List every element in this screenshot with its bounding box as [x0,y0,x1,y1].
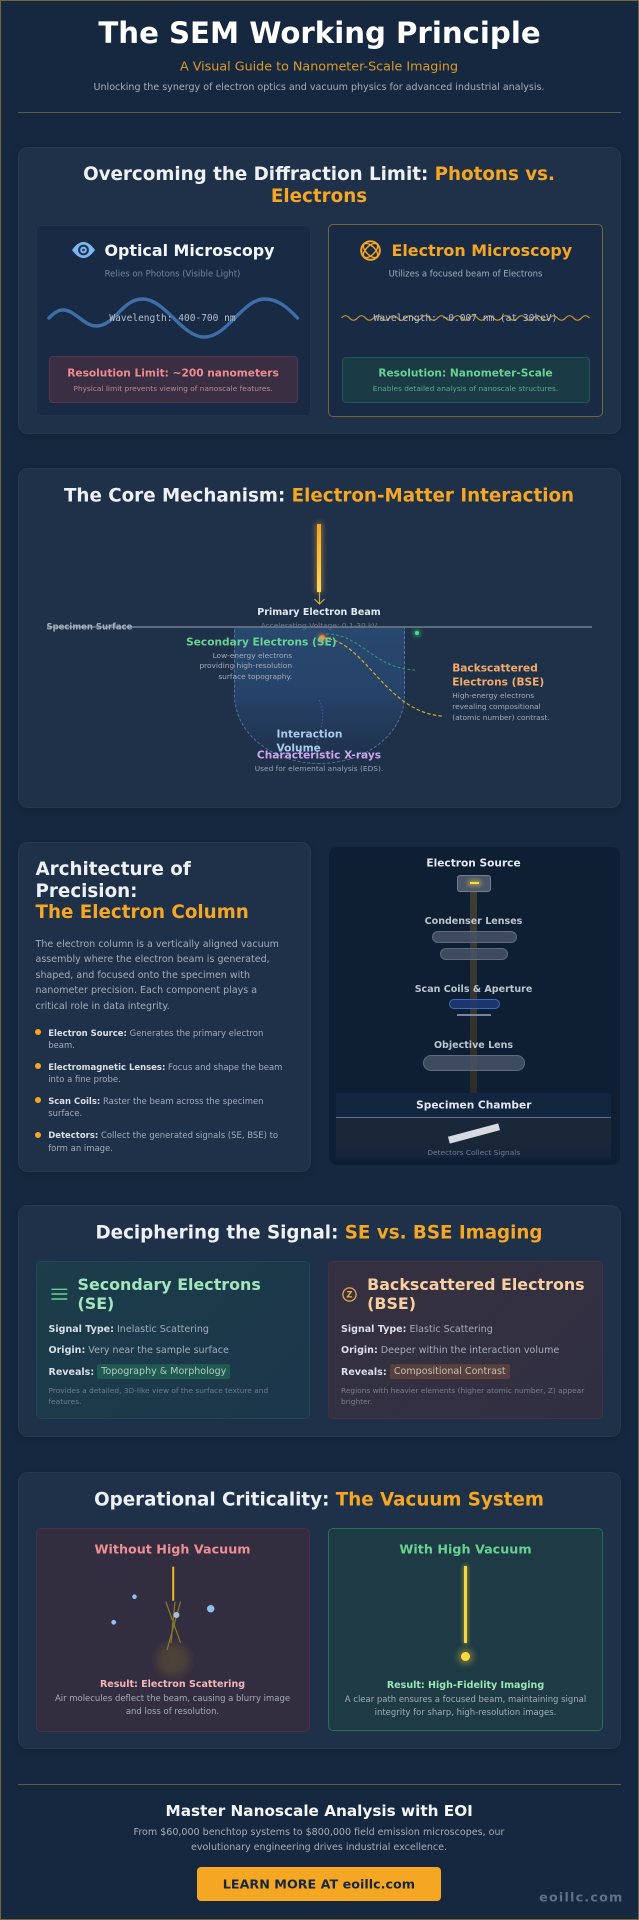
condenser lenses [425,916,522,960]
interaction volume [234,626,404,764]
reveals: Reveals: [48,1367,94,1378]
label: secondary electrons: Low-energy electrons [213,651,292,660]
specimen surface line [46,626,592,628]
panel: photons vs electrons [18,146,620,434]
scan coils and aperture [415,984,532,1016]
callout: resolution limit: Resolution Limit: ~200 nanometers [67,367,279,379]
label: secondary electrons: providing high-resolution [199,661,292,670]
heading: Precision: [36,881,137,902]
note [48,1386,268,1406]
footer heading: Master Nanoscale Analysis with EOI [166,1802,473,1820]
callout: resolution limit [48,356,298,402]
icon: topography lines [52,1288,68,1300]
list item: detectors: Detectors: Collect the generated signals (SE, BSE) to [48,1130,278,1140]
label: characteristic x-rays [255,749,383,773]
note: brighter. [341,1397,372,1406]
label: backscattered electrons: Backscattered [452,662,538,674]
panel: SE vs BSE imaging [18,1205,620,1437]
card: optical microscopy [36,224,310,416]
list item: electron source [35,1028,263,1050]
button: LEARN MORE AT eoillc.com [223,1877,415,1892]
description: nanometer precision. Each component plays a [36,985,257,996]
title: The SEM Working Principle [98,16,541,50]
note: Provides a detailed, 3D-like view of the surface texture and [48,1386,268,1395]
result text: integrity for sharp, high-resolution images. [375,1707,556,1717]
card subtitle: Relies on Photons (Visible Light) [105,268,240,278]
specimen chamber: Specimen Chamber [416,1099,531,1111]
list item: electron source: beam. [48,1040,75,1050]
signal paths [316,634,442,745]
icon: z contrast [342,1287,357,1302]
list item: lenses [35,1062,282,1084]
label: interaction volume [276,728,342,755]
label: interaction volume: Interaction [276,728,342,740]
label: characteristic x-rays: Used for elemental analysis (EDS). [255,764,383,773]
note: Regions with heavier elements (higher atomic number, Z) appear [341,1386,584,1395]
icon: eye [72,242,95,258]
scattered beam [111,1566,214,1650]
focused beam [464,1566,467,1643]
electron source: Electron Source [426,858,521,870]
list item: scan coils: Scan Coils: Raster the beam across the specimen [48,1096,264,1106]
result text [344,1694,586,1717]
panel: core mechanism [18,468,620,808]
callout: resolution: Resolution: Nanometer-Scale [378,368,553,380]
chart: short wavelength wave [341,315,590,321]
card title: (SE) [78,1294,114,1313]
specimen chamber [336,1093,611,1158]
note [341,1386,584,1406]
wavelength label: Wavelength: 400-700 nm [109,313,236,324]
list item: scan coils: surface. [48,1108,82,1118]
card: with high vacuum [328,1528,602,1731]
electron source [426,858,521,892]
panel: vacuum system [18,1472,620,1749]
origin: Origin: Deeper within the interaction volume [341,1345,559,1356]
list item: detectors: form an image. [48,1143,113,1153]
watermark: eoillc.com [539,1889,624,1904]
label: backscattered electrons: Electrons (BSE) [452,677,544,689]
label: voltage: Accelerating Voltage: 0.1-30 kV [261,621,377,630]
condenser lenses: Condenser Lenses [425,916,522,927]
subtitle: A Visual Guide to Nanometer-Scale Imaging [180,58,458,73]
card title: (BSE) [367,1294,416,1313]
glow: blurred spot [150,1638,194,1682]
arrow: beam direction [314,592,325,605]
card title [367,1275,585,1313]
card: electron microscopy [328,224,602,416]
tagline: Unlocking the synergy of electron optics and vacuum physics for advanced industrial analysis. [94,82,544,93]
card title: Electron Microscopy [392,241,572,260]
heading: Overcoming the Diffraction Limit: Photons vs. [83,164,555,185]
card title [78,1275,261,1313]
icon: electron lattice [360,240,381,261]
panel: electron column text [18,842,310,1172]
reveals: Reveals: [341,1367,387,1378]
specimen chamber: Detectors Collect Signals [427,1148,520,1157]
beam path [470,892,477,1092]
heading: The Core Mechanism: Electron-Matter Interaction [64,485,574,506]
focused spot [461,1652,470,1661]
header [94,16,544,93]
tag [390,1364,510,1379]
heading [83,164,555,206]
label: specimen surface: Specimen Surface [46,621,132,631]
label: backscattered electrons: (atomic number) contrast. [452,713,550,722]
list item: detectors [35,1130,278,1153]
card: backscattered electrons [328,1261,602,1419]
primary electron beam [317,524,321,592]
signal type: Signal Type: Inelastic Scattering [48,1324,209,1335]
callout: resolution [342,356,590,402]
objective lens [423,1040,525,1071]
list item: scan coils [35,1096,264,1118]
card title: With High Vacuum [399,1542,532,1557]
card title: Secondary Electrons [78,1275,261,1294]
tag [97,1364,230,1379]
heading: Deciphering the Signal: SE vs. BSE Imaging [96,1223,542,1244]
footer [134,1802,624,1904]
card: secondary electrons [36,1261,310,1419]
heading [36,859,249,923]
card subtitle: Utilizes a focused beam of Electrons [389,269,542,279]
wavelength label: Wavelength: ~0.007 nm (at 30keV) [374,313,557,324]
card: without high vacuum [36,1528,310,1732]
description: shaped, and focused onto the specimen with [36,970,250,981]
electron impact point [319,635,325,641]
callout: resolution: Enables detailed analysis of nanoscale structures. [373,384,558,393]
tag: Topography & Morphology [101,1366,226,1377]
scan coils and aperture: Scan Coils & Aperture [415,984,532,995]
description: critical role in data integrity. [36,1001,170,1012]
diagram: electron column [329,847,620,1165]
heading: Operational Criticality: The Vacuum System [94,1489,544,1510]
card title: Backscattered Electrons [367,1275,585,1294]
description: assembly where the electron beam is generated, [36,954,270,965]
list item: lenses: Electromagnetic Lenses: Focus and shape the beam [48,1062,282,1072]
list item: electron source: Electron Source: Generates the primary electron [48,1028,263,1038]
result title: Result: High-Fidelity Imaging [387,1680,544,1691]
label: secondary electrons [186,636,337,681]
card title: Optical Microscopy [104,240,275,259]
result title: Result: Electron Scattering [100,1679,245,1690]
description: The electron column is a vertically aligned vacuum [36,939,279,950]
heading: Electrons [271,186,367,206]
objective lens: Objective Lens [434,1040,513,1051]
heading: Architecture of [36,859,191,880]
tag: Compositional Contrast [394,1366,506,1377]
label: secondary electrons: surface topography. [218,672,292,681]
note: features. [48,1397,81,1406]
list item: lenses: into a fine probe. [48,1074,121,1084]
origin: Origin: Very near the sample surface [48,1345,229,1356]
label: characteristic x-rays: Characteristic X-rays [257,749,381,761]
result text: A clear path ensures a focused beam, maintaining signal [345,1694,586,1704]
label: backscattered electrons [452,662,550,722]
chart: long wavelength wave [47,297,300,339]
label: backscattered electrons: High-energy electrons [452,691,534,700]
result text: Air molecules deflect the beam, causing a blurry image [55,1693,290,1703]
button [197,1867,441,1901]
footer text: evolutionary engineering drives industrial excellence. [191,1842,447,1853]
signal type: Signal Type: Elastic Scattering [341,1324,493,1335]
label: secondary electrons: Secondary Electrons (SE) [186,636,337,648]
result text: and loss of resolution. [126,1706,219,1716]
heading: The Electron Column [36,902,249,923]
footer text: From $60,000 benchtop systems to $800,000 field emission microscopes, our [134,1827,504,1838]
icon: z contrast: Z [346,1290,352,1300]
emitted electron dot [415,631,419,635]
detector [448,1124,500,1144]
result text [55,1693,290,1716]
footer text [134,1827,504,1853]
description [35,939,279,1012]
label: backscattered electrons: revealing compositional [452,702,541,711]
card title: Without High Vacuum [94,1541,251,1556]
callout: resolution limit: Physical limit prevents viewing of nanoscale features. [73,384,273,393]
label: primary beam: Primary Electron Beam [257,607,381,618]
label: interaction volume: Volume [276,743,321,755]
